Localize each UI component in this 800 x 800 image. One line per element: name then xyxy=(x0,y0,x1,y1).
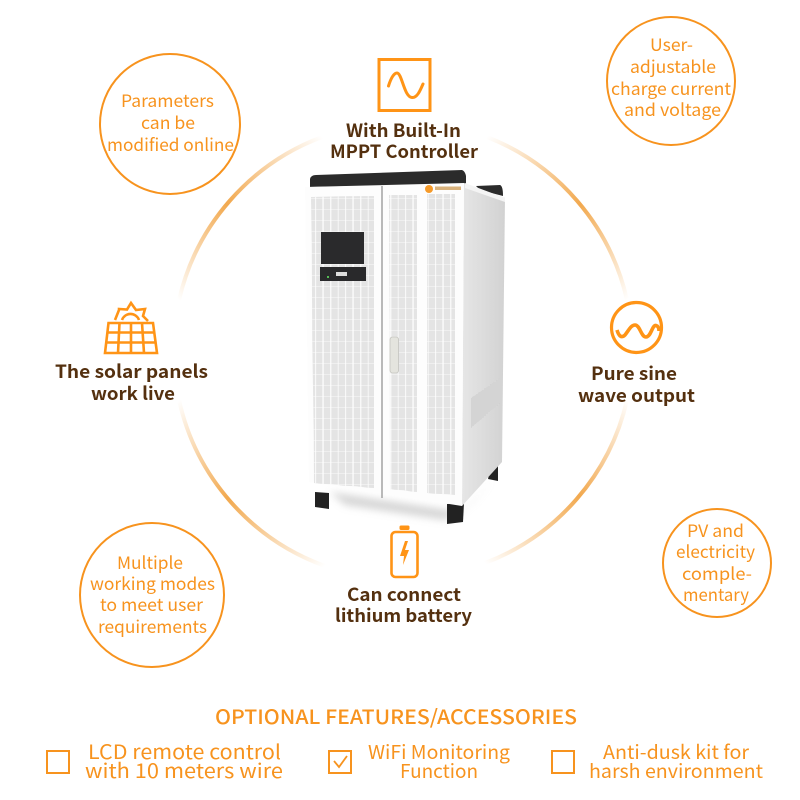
option: anti-dusk kit: Anti-dusk kit for xyxy=(603,738,750,765)
option: WiFi monitoring: Function xyxy=(400,757,478,784)
heading: pure sine xyxy=(578,360,695,408)
icon: solar panel with sun xyxy=(105,303,157,353)
heading: MPPT controller xyxy=(330,117,478,164)
door handle xyxy=(390,337,398,373)
black top cover xyxy=(310,170,503,196)
callout: working modes: working modes xyxy=(90,570,215,595)
heading: solar panels: work live xyxy=(91,380,175,406)
callout: PV and electricity: electricity xyxy=(676,538,755,563)
callout: PV and electricity: PV and xyxy=(687,517,744,542)
option: anti-dusk kit: harsh environment xyxy=(589,757,763,784)
cabinet front doors xyxy=(305,183,464,506)
heading: solar panels: The solar panels xyxy=(55,358,208,384)
touch screen xyxy=(321,232,364,264)
heading: lithium battery xyxy=(335,581,473,628)
option: WiFi monitoring: WiFi Monitoring xyxy=(368,738,510,765)
icon: sine wave in square xyxy=(379,60,430,110)
callout: user adjustable xyxy=(607,17,735,145)
callout: parameters: modified online xyxy=(107,131,234,156)
heading: lithium battery: lithium battery xyxy=(335,602,473,628)
heading: MPPT controller: With Built-In xyxy=(346,117,461,143)
option: LCD remote control xyxy=(47,736,283,784)
heading: pure sine: Pure sine xyxy=(591,360,677,386)
callout: working modes: requirements xyxy=(98,613,207,638)
callout: PV and electricity xyxy=(663,509,771,617)
cabinet feet xyxy=(315,464,498,524)
callout: PV and electricity: comple- xyxy=(682,560,752,585)
heading: pure sine: wave output xyxy=(578,382,695,408)
option: LCD remote control: with 10 meters wire xyxy=(85,755,283,784)
callout: working modes: Multiple xyxy=(117,549,183,574)
option: anti-dusk kit xyxy=(552,738,763,784)
option: LCD remote control: LCD remote control xyxy=(88,736,281,765)
heading: solar panels xyxy=(55,358,208,406)
control panel xyxy=(320,267,366,281)
door perforation xyxy=(311,194,455,495)
side vent xyxy=(471,378,500,428)
callout: user adjustable: User- xyxy=(650,31,693,56)
callout: PV and electricity: mentary xyxy=(683,581,749,606)
callout: parameters xyxy=(100,54,240,194)
brand logo xyxy=(425,185,461,193)
option: WiFi monitoring xyxy=(329,738,510,784)
heading: optional features: OPTIONAL FEATURES/ACCESSORIES xyxy=(215,701,577,730)
heading: lithium battery: Can connect xyxy=(347,581,461,607)
heading: MPPT controller: MPPT Controller xyxy=(330,138,478,164)
callout: working modes: to meet user xyxy=(100,591,203,616)
callout: user adjustable: and voltage xyxy=(624,96,721,121)
icon: battery xyxy=(392,526,418,577)
floor shadow xyxy=(330,478,495,520)
decorative ring arcs xyxy=(179,137,627,566)
cabinet side xyxy=(462,183,505,506)
callout: user adjustable: charge current xyxy=(611,75,732,100)
callout: user adjustable: adjustable xyxy=(630,53,716,78)
icon: pure sine wave circle xyxy=(612,302,662,352)
callout: parameters: Parameters xyxy=(121,87,214,112)
battery cabinet product image xyxy=(305,170,505,524)
callout: parameters: can be xyxy=(141,109,195,134)
callout: working modes xyxy=(80,523,224,667)
